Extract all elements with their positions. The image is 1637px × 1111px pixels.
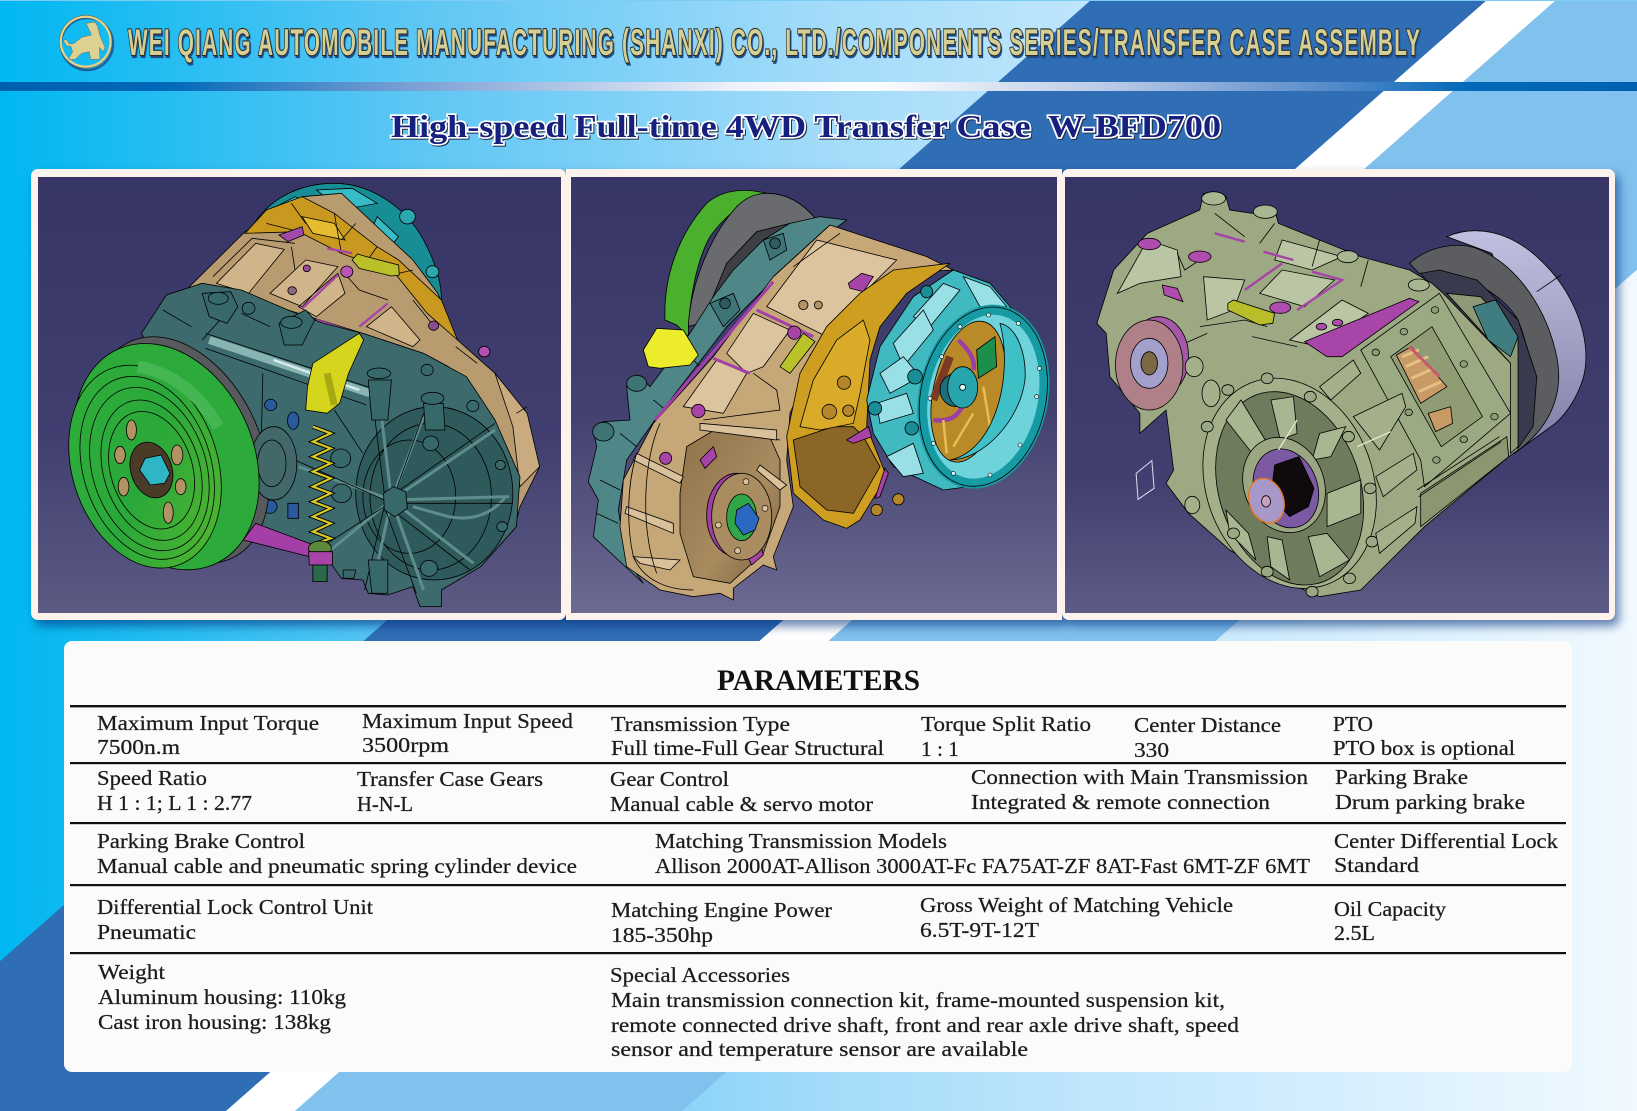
row 1 parameters: Torque Split Ratio	[921, 712, 1091, 736]
purple fittings	[279, 227, 304, 242]
green drum	[41, 319, 291, 594]
panel: front-left render	[38, 177, 561, 613]
hub behind drum	[250, 427, 297, 500]
row 1 parameters: 3500rpm	[362, 733, 449, 757]
row 4 parameters: Pneumatic	[97, 920, 196, 944]
row 1 parameters: Center Distance	[1134, 713, 1281, 737]
case bosses	[202, 292, 507, 593]
row 2 parameters: Drum parking brake	[1335, 790, 1525, 814]
pink rear disc	[1129, 317, 1189, 397]
row 5 parameters: remote connected drive shaft, front and rear axle drive shaft, speed	[611, 1013, 1240, 1037]
teal case behind	[588, 217, 847, 583]
lever	[780, 333, 815, 373]
upper case highlights	[1117, 240, 1368, 347]
gold cover	[245, 197, 457, 340]
purple strut	[243, 523, 332, 562]
row 4 parameters: Gross Weight of Matching Vehicle	[920, 893, 1233, 917]
row 3 parameters: Manual cable and pneumatic spring cylinder device	[97, 854, 577, 878]
row 3 parameters: Matching Transmission Models	[655, 829, 947, 853]
row 5 parameters	[98, 960, 1240, 1061]
row 4 parameters: Differential Lock Control Unit	[97, 895, 373, 919]
tan housing	[188, 193, 540, 527]
gray ring	[1409, 245, 1559, 453]
row 3 parameters: Parking Brake Control	[97, 829, 305, 853]
front flange	[1179, 362, 1400, 605]
row 5 parameters: sensor and temperature sensor are available	[611, 1037, 1028, 1061]
table rules	[70, 705, 1566, 954]
row 4 parameters: 6.5T-9T-12T	[920, 918, 1039, 942]
drum hub and bolt	[124, 438, 179, 502]
row 4 parameters: 2.5L	[1334, 921, 1375, 945]
row 3 parameters: Standard	[1334, 853, 1420, 877]
lavender drum	[1447, 231, 1586, 453]
yellow lever	[1228, 300, 1275, 325]
header band	[0, 82, 1637, 91]
row 1 parameters: Transmission Type	[611, 712, 790, 736]
tan main housing	[620, 225, 953, 600]
row 2 parameters: H 1 : 1; L 1 : 2.77	[97, 791, 252, 815]
panel: front-right render	[1065, 177, 1609, 613]
row 5 parameters: Main transmission connection kit, frame-mounted suspension kit,	[611, 988, 1225, 1012]
row 4 parameters: 185-350hp	[611, 923, 713, 947]
row 1 parameters: Maximum Input Torque	[97, 711, 319, 735]
row 2 parameters: Parking Brake	[1335, 765, 1468, 789]
yellow plate	[643, 328, 698, 368]
row 2 parameters: Transfer Case Gears	[357, 767, 543, 791]
row 2 parameters: Integrated & remote connection	[971, 790, 1271, 814]
bosses	[1185, 357, 1417, 553]
row 1 parameters: PTO box is optional	[1333, 736, 1515, 760]
purple ribs and washers	[1215, 233, 1342, 310]
small plugs	[263, 399, 299, 518]
row 2 parameters: H-N-L	[357, 792, 413, 816]
gold cover	[787, 263, 950, 528]
row 2 parameters: Connection with Main Transmission	[971, 765, 1309, 789]
coil spring	[313, 427, 331, 543]
row 2 parameters: Gear Control	[610, 767, 729, 791]
subtitle: product name: High-speed Full-time 4WD Transfer Case W-BFD700	[391, 108, 1221, 144]
purple tabs	[660, 273, 873, 565]
row 1 parameters: Maximum Input Speed	[362, 709, 574, 733]
title: company and series header: WEI QIANG AUTOMOBILE MANUFACTURING (SHANXI) CO., LTD./COMPONENTS SERIES/TRANSFER CASE ASSEMBLY	[128, 23, 1420, 64]
case ribs	[299, 380, 509, 590]
panel: rear-side render	[571, 177, 1063, 613]
flange interior	[919, 314, 1017, 469]
gray drum ring	[59, 312, 303, 588]
logo: golden lion emblem	[59, 15, 113, 70]
row 1 parameters: 1 : 1	[921, 737, 959, 761]
green drum edge	[665, 190, 767, 337]
row 2 parameters	[97, 765, 1525, 816]
teal end ring	[252, 183, 441, 300]
row 1 parameters: 330	[1134, 738, 1169, 762]
row 1 parameters: Full time-Full Gear Structural	[611, 736, 884, 760]
cyan ribbed ring	[867, 270, 1043, 490]
heading: parameters: PARAMETERS	[717, 664, 920, 697]
side plate	[1361, 293, 1511, 487]
row 2 parameters: Speed Ratio	[97, 766, 207, 790]
central bore	[1232, 429, 1336, 541]
reference plane outline	[1136, 461, 1154, 499]
row 5 parameters: Weight	[98, 960, 165, 984]
yellow-green lever	[352, 254, 399, 276]
row 3 parameters	[97, 829, 1559, 878]
row 1 parameters: 7500n.m	[97, 735, 180, 759]
lower disc face	[680, 427, 780, 583]
front hub disc	[707, 473, 767, 557]
olive case body	[1097, 193, 1518, 597]
image frames	[31, 169, 1615, 620]
row 4 parameters	[97, 893, 1447, 947]
yellow bracket	[306, 333, 364, 413]
row 3 parameters: Allison 2000AT-Allison 3000AT-Fc FA75AT-ZF 8AT-Fast 6MT-ZF 6MT	[655, 854, 1310, 878]
row 4 parameters: Matching Engine Power	[611, 898, 832, 922]
row 1 parameters: PTO	[1333, 712, 1373, 736]
teal main case	[141, 283, 520, 607]
lower ledge	[1421, 437, 1509, 527]
row 2 parameters: Manual cable & servo motor	[610, 792, 873, 816]
row 3 parameters: Center Differential Lock	[1334, 829, 1559, 853]
row 5 parameters: Aluminum housing: 110kg	[98, 985, 347, 1009]
hub gear	[940, 373, 973, 407]
row 5 parameters: Special Accessories	[610, 963, 790, 987]
row 5 parameters: Cast iron housing: 138kg	[98, 1010, 332, 1034]
panel: parameters table	[64, 641, 1572, 1072]
row 4 parameters: Oil Capacity	[1334, 897, 1447, 921]
row 1 parameters	[97, 709, 1515, 762]
flange ring	[910, 302, 1056, 492]
gray drum ring	[688, 193, 817, 327]
